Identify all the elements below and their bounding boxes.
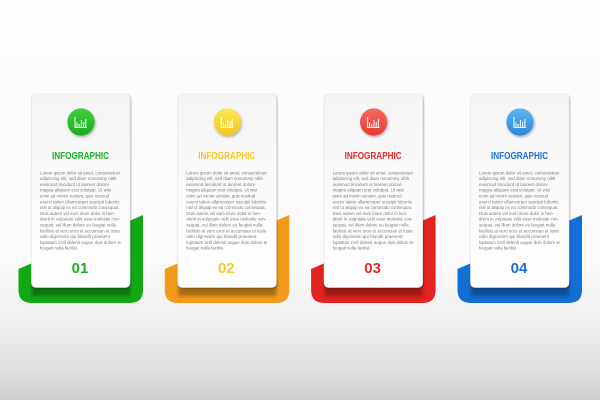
body text: euismod tincidunt ut laoreet dolore [40,182,109,188]
white card [324,94,423,288]
body text: drerit in vulputate velit esse molestie con- [186,217,267,223]
body text: nisl ut aliquip ex ea commodo consequat. [40,205,120,211]
panel: step 03 red [311,94,436,303]
body text [479,170,560,252]
body text: facilisis at vero eros et accumsan et iusto [333,228,413,234]
body text: nisl ut aliquip ex ea commodo consequat. [479,205,558,211]
body text: odio dignissim qui blandit praesent [186,234,257,240]
body text: adipiscing elit, sed diam nonummy nibh [186,176,263,182]
panel: step 01 green [18,94,143,303]
body text: luptatum zzril delenit augue duis dolore te [479,240,560,246]
body text: feugait nulla facilisi. [479,246,517,252]
icon: chart badge [506,108,534,136]
body text: magna aliquam erat volutpat. Ut wisi [479,188,550,194]
panel: step 04 blue [458,94,582,303]
body text: odio dignissim qui blandit praesent [333,234,403,240]
white card [470,94,569,288]
body text: euismod tincidunt ut laoreet dolore [333,182,402,188]
panel: step 02 orange [165,94,289,303]
green backing shape [18,215,143,303]
body text: nisl ut aliquip ex ea commodo consequat. [333,205,412,211]
body text: nisl ut aliquip ex ea commodo consequat. [186,205,266,211]
card shadow [32,278,130,296]
body text: magna aliquam erat volutpat. Ut wisi [40,188,111,194]
body text: luptatum zzril delenit augue duis dolore te [186,240,268,246]
body text: Lorem ipsum dolor sit amet, consectetuer [186,170,267,176]
body text: enim ad minim veniam, quis nostrud [40,193,109,199]
heading: INFOGRAPHIC [198,151,255,162]
heading: INFOGRAPHIC [491,151,548,162]
red backing shape [311,215,436,303]
body text [186,170,268,252]
icon: chart badge [214,108,241,136]
step number: 03 [364,260,381,277]
body text: exerci tation ullamcorper suscipit lobortis [186,199,266,205]
body text: feugait nulla facilisi. [186,246,224,252]
card shadow [471,278,569,296]
step number: 02 [218,260,235,277]
body text: odio dignissim qui blandit praesent [40,234,111,240]
body text: sequat, vel illum dolore eu feugiat nulla [479,222,555,228]
icon: chart badge [360,108,387,136]
body text: Duis autem vel eum iriure dolor in hen- [40,211,115,217]
white card [178,94,276,288]
blue backing shape [458,215,582,303]
body text: enim ad minim veniam, quis nostrud [186,193,256,199]
card shadow [325,278,423,296]
body text: magna aliquam erat volutpat. Ut wisi [333,188,404,194]
body text: drerit in vulputate velit esse molestie con- [40,217,120,223]
icon: chart badge [67,108,95,136]
body text: magna aliquam erat volutpat. Ut wisi [186,188,257,194]
body text: Duis autem vel eum iriure dolor in hen- [186,211,262,217]
body text: enim ad minim veniam, quis nostrud [479,193,548,199]
white card [32,94,130,288]
body text: Lorem ipsum dolor sit amet, consectetuer [40,170,121,176]
step number: 01 [72,260,88,277]
body text: euismod tincidunt ut laoreet dolore [479,182,548,188]
body text: Duis autem vel eum iriure dolor in hen- [479,211,554,217]
body text: odio dignissim qui blandit praesent [479,234,550,240]
body text: adipiscing elit, sed diam nonummy nibh [479,176,556,182]
body text: luptatum zzril delenit augue duis dolore te [333,240,414,246]
orange backing shape [165,215,289,303]
body text: sequat, vel illum dolore eu feugiat nulla [333,222,409,228]
card shadow [178,278,276,296]
body text: facilisis at vero eros et accumsan et iusto [40,228,120,234]
body text: euismod tincidunt ut laoreet dolore [186,182,256,188]
body text [40,170,121,252]
body text: sequat, vel illum dolore eu feugiat nulla [186,222,263,228]
body text [333,170,414,252]
heading: INFOGRAPHIC [52,151,109,162]
step number: 04 [511,260,528,277]
body text: feugait nulla facilisi. [333,246,371,252]
body text: Lorem ipsum dolor sit amet, consectetuer [479,170,560,176]
body text: drerit in vulputate velit esse molestie con- [479,217,559,223]
heading: INFOGRAPHIC [345,151,402,162]
body text: adipiscing elit, sed diam nonummy nibh [333,176,409,182]
body text: facilisis at vero eros et accumsan et iusto [479,228,559,234]
body text: exerci tation ullamcorper suscipit lobortis [40,199,120,205]
body text: sequat, vel illum dolore eu feugiat nulla [40,222,116,228]
body text: exerci tation ullamcorper suscipit lobortis [333,199,413,205]
body text: drerit in vulputate velit esse molestie con- [333,217,413,223]
body text: exerci tation ullamcorper suscipit lobortis [479,199,559,205]
body text: facilisis at vero eros et accumsan et iusto [186,228,267,234]
body text: Duis autem vel eum iriure dolor in hen- [333,211,408,217]
body text: luptatum zzril delenit augue duis dolore te [40,240,121,246]
body text: Lorem ipsum dolor sit amet, consectetuer [333,170,413,176]
body text: feugait nulla facilisi. [40,246,78,252]
body text: adipiscing elit, sed diam nonummy nibh [40,176,117,182]
body text: enim ad minim veniam, quis nostrud [333,193,402,199]
